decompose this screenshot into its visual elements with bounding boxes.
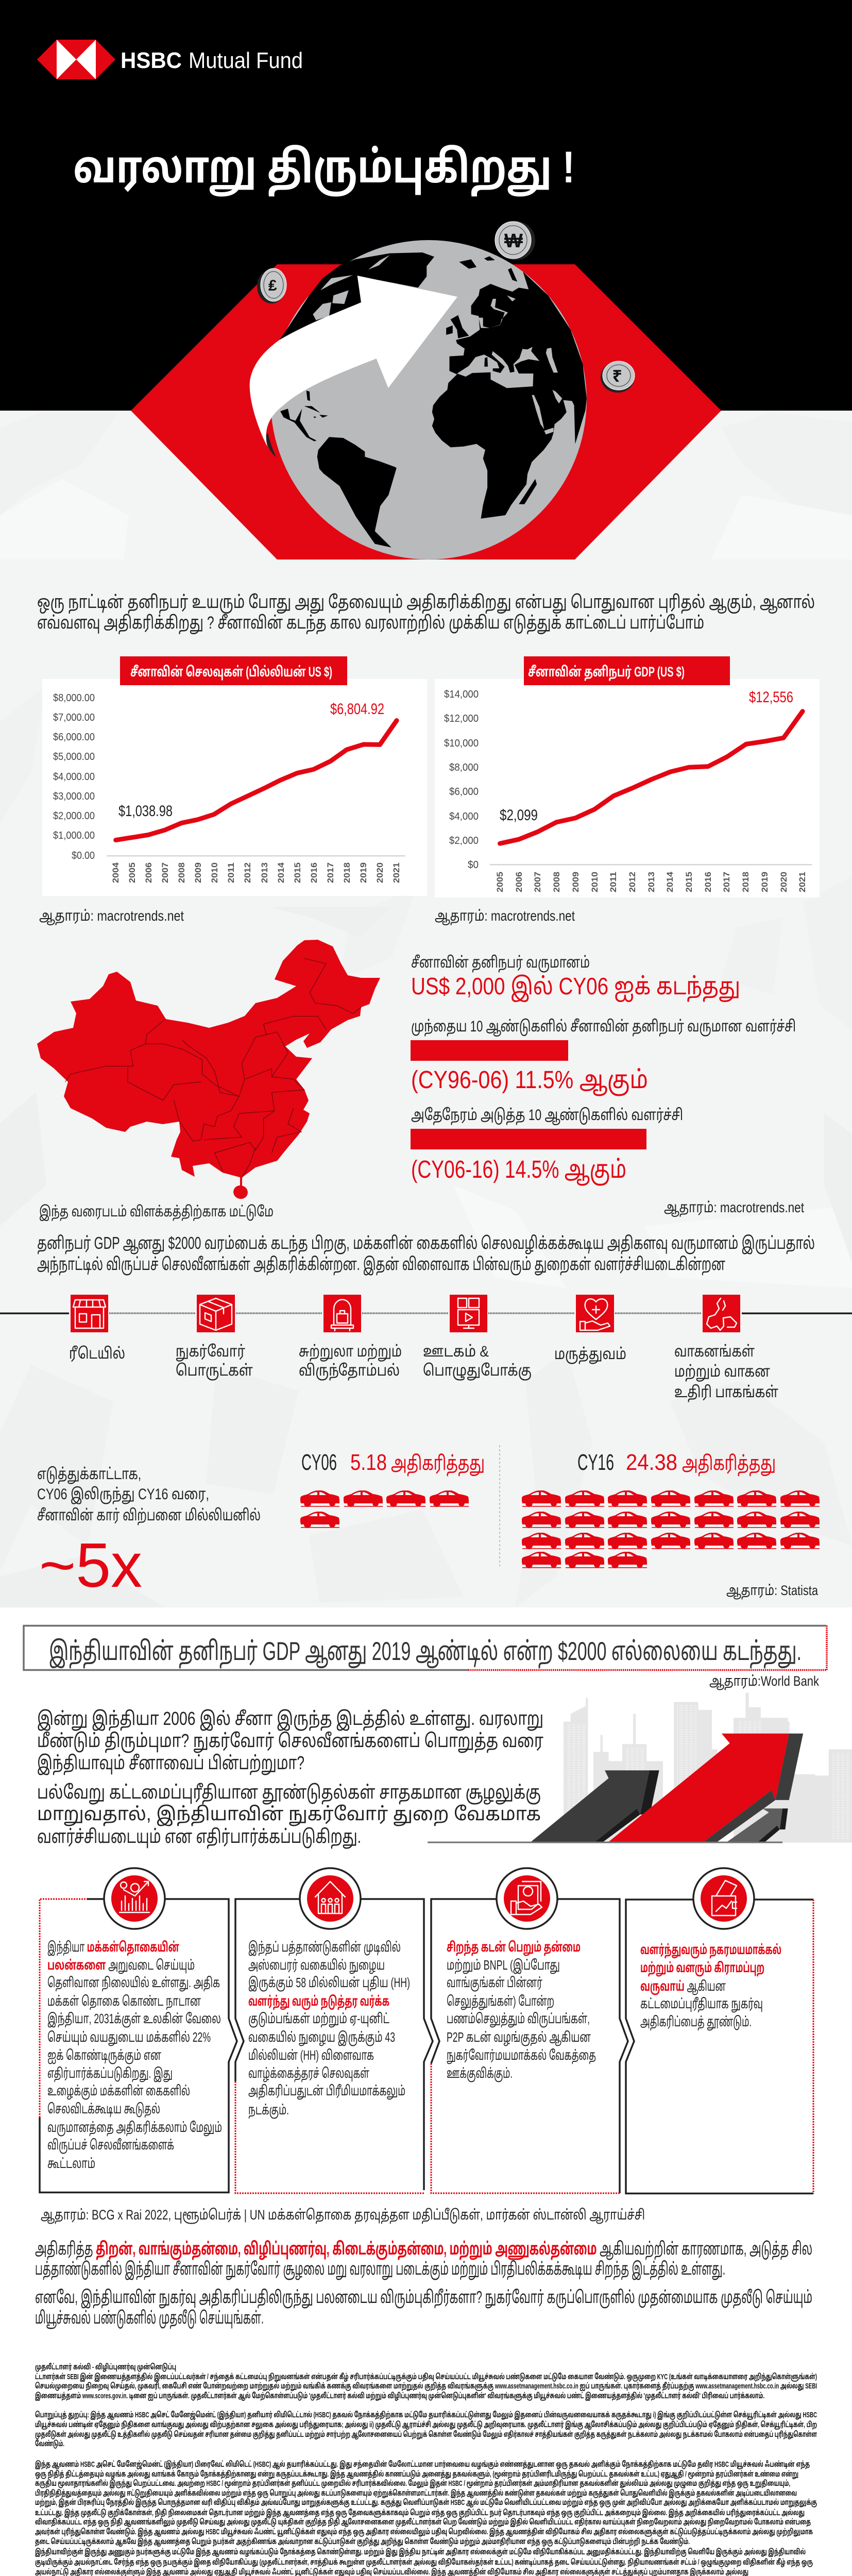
- chart panel: China expenditure: $3,000.00: [53, 791, 95, 802]
- text: credit and payments: செலுத்துங்கள்) போன்ற: [447, 1993, 554, 2010]
- text: credit and payments: வாங்குங்கள் பின்னர்: [447, 1975, 542, 1991]
- sector label: consumer goods: நுகர்வோர்: [176, 1343, 245, 1362]
- hero: globe with arrow: [250, 240, 587, 560]
- sector label: healthcare: மருத்துவம்: [554, 1346, 626, 1364]
- big stat: ~5x: ~5x: [39, 1530, 142, 1600]
- text: aspirers and middle class: இந்தப் பத்தாண்டுகளின் முடிவில்: [248, 1939, 401, 1956]
- chart panel: China GDP per capita: $6,000: [449, 786, 479, 798]
- sector label: tourism: சுற்றுலா மற்றும்: [299, 1343, 402, 1362]
- header black band: [0, 0, 852, 411]
- India paragraph 1: மீண்டும் திரும்புமா? நுகர்வோர் செலவீனங்களைப் பொறுத்த வரை: [37, 1730, 543, 1753]
- sector label: automobiles: உதிரி பாகங்கள்: [674, 1384, 778, 1402]
- logo: HSBC Mutual Fund: [37, 40, 303, 79]
- text: urbanisation and rural income: மற்றும் வளரும் கிராமப்புற: [640, 1960, 764, 1977]
- chart panel: China GDP per capita: $4,000: [449, 811, 479, 822]
- chart panel: China expenditure: 2019: [359, 862, 368, 883]
- text: aspirers and middle class: [248, 1939, 410, 2119]
- panel: urbanisation and rural income: [626, 1868, 813, 2194]
- sector timeline: [0, 1295, 852, 1402]
- chart panel: China GDP per capita: $0: [468, 859, 479, 871]
- CY16 cars: [522, 1490, 820, 1568]
- chart panel: China GDP per capita: $8,000: [449, 762, 479, 773]
- text: credit and payments: மற்றும் BNPL (இப்போது: [447, 1957, 560, 1974]
- chart panel: China expenditure: $5,000.00: [53, 751, 95, 762]
- icon: coin rupee: [601, 361, 635, 393]
- chart panel: China GDP per capita: 2015: [684, 872, 694, 892]
- sector label: automobiles: வாகனங்கள்: [674, 1343, 755, 1360]
- text: urbanisation and rural income: அதிகரிப்பைத் தூண்டும்.: [640, 2014, 752, 2030]
- source: macrotrends: ஆதாரம்: macrotrends.net: [664, 1199, 804, 1217]
- chart panel: China GDP per capita: சீனாவின் தனிநபர் GDP (US $): [528, 664, 685, 681]
- sector label: media: [423, 1343, 532, 1381]
- panel: aspirers and middle class: [235, 1868, 433, 2193]
- sector label: tourism: விருந்தோம்பல்: [299, 1362, 400, 1381]
- stats: China per capita income: சீனாவின் தனிநபர் வருமானம்: [411, 954, 590, 973]
- chart panel: China expenditure: $6,000.00: [53, 732, 95, 743]
- source: World Bank: ஆதாரம்:World Bank: [709, 1673, 819, 1690]
- disclaimer fine print: முதலீட்டாளர் கல்வி - விழிப்புணர்வு முன்னெடுப்பு: [35, 2362, 176, 2372]
- chart panel: China expenditure: $4,000.00: [53, 771, 95, 783]
- chart panel: China expenditure: $1,000.00: [53, 830, 95, 841]
- text: demographic dividend: விருப்பச் செலவீனங்களைக்: [47, 2137, 174, 2154]
- chart panel: China expenditure: 2016: [309, 862, 319, 883]
- icon: finance hand: [497, 1868, 557, 1929]
- chart panel: China GDP per capita: 2010: [590, 872, 600, 892]
- text: aspirers and middle class: நடக்கும்.: [248, 2102, 289, 2119]
- eurasia and africa: [432, 272, 587, 519]
- text: credit and payments: நுகர்வோர்மயமாக்கல் வேகத்தை: [447, 2047, 596, 2064]
- chart panel: China expenditure: 2014: [276, 862, 286, 883]
- icon: coin pound: ₤: [268, 277, 277, 294]
- icon: healthcare: [576, 1295, 614, 1332]
- chart panel: China expenditure: $2,000.00: [53, 810, 95, 822]
- CY06 heading: CY06: [301, 1450, 337, 1475]
- icon: coin won: ₩: [504, 230, 523, 252]
- text: credit and payments: ஊக்குவிக்கும்.: [447, 2065, 513, 2082]
- example text: car sales: எடுத்துக்காட்டாக,: [37, 1466, 141, 1484]
- chart panel: China GDP per capita: 2008: [552, 872, 561, 892]
- text: aspirers and middle class: அஸ்பைரர் வகையில் நுழைய: [248, 1957, 385, 1974]
- logo: HSBC Mutual Fund: Mutual Fund: [189, 48, 303, 73]
- India paragraph 2: பல்வேறு கட்டமைப்புரீதியான தூண்டுதல்கள் சாதகமான சூழலுக்கு: [37, 1782, 541, 1805]
- camouflage background: [0, 411, 852, 1607]
- icon: coin pound: [257, 268, 286, 303]
- callout: India crossed $2000: [24, 1625, 827, 1670]
- chart panel: China GDP per capita: $12,556: [749, 689, 793, 706]
- chart panel: China expenditure: 2018: [342, 862, 352, 883]
- icon: tourism: [323, 1295, 361, 1332]
- chart panel: China expenditure: 2006: [144, 862, 154, 883]
- icon: retail: [71, 1295, 108, 1332]
- text: urbanisation and rural income: [640, 1942, 781, 2030]
- chart panel: China GDP per capita: 2017: [722, 872, 731, 892]
- disclaimer fine print: வேண்டும்.: [35, 2439, 64, 2449]
- stats: China per capita income: US$ 2,000 இல் CY06 ஐக் கடந்தது: [411, 973, 740, 1003]
- map of China: [37, 940, 380, 1200]
- hero: red hexagon: [131, 264, 721, 560]
- panel: credit and payments: [431, 1868, 628, 2193]
- source: chart 2: ஆதாரம்: macrotrends.net: [435, 908, 575, 925]
- chart panel: China expenditure: $8,000.00: [53, 692, 95, 704]
- seas: [479, 299, 508, 328]
- chart panel: China GDP per capita: 2007: [533, 872, 542, 892]
- greenland and north america: [279, 252, 434, 340]
- arrow: [250, 276, 457, 447]
- sector label: retail: ரீடெயில்: [69, 1345, 125, 1362]
- text: credit and payments: பணம்செலுத்தும் விருப்பங்கள்,: [447, 2011, 590, 2027]
- chart panel: China GDP per capita: $12,000: [444, 713, 479, 724]
- text: demographic dividend: இந்தியா, 2031க்குள் உலகின் வேலை: [47, 2011, 221, 2028]
- uk and ireland: [446, 315, 469, 338]
- conclusion paragraph: மியூச்சுவல் பண்டுகளில் முதலீடு செய்யுங்கள்.: [35, 2308, 264, 2329]
- text: aspirers and middle class: வகையில் நுழைய இருக்கும் 43: [248, 2029, 395, 2046]
- chart panel: China GDP per capita: 2013: [646, 872, 656, 892]
- icon: coin won: [495, 221, 535, 260]
- source: BCG: ஆதாரம்: BCG x Rai 2022, புளூம்பெர்க் | UN மக்கள்தொகை தரவுத்தள மதிப்பீடுகள், மார்கன் ஸ்டான்லி ஆராய்ச்சி: [41, 2207, 645, 2224]
- icon: wallet: [693, 1868, 754, 1929]
- text: aspirers and middle class: வளர்ந்து வரும் நடுத்தர வர்க்க: [248, 1993, 389, 2010]
- sector label: media: ஊடகம் &: [423, 1343, 489, 1360]
- CY16 heading: அதிகரித்தது: [682, 1453, 776, 1476]
- chart panel: China GDP per capita: $2,099: [500, 807, 538, 824]
- sector label: consumer goods: பொருட்கள்: [176, 1362, 253, 1381]
- India paragraph 1: இந்தியாவும் சீனாவைப் பின்பற்றுமா?: [37, 1752, 304, 1775]
- stats: China per capita income: (CY96-06) 11.5% ஆகும்: [411, 1066, 648, 1096]
- intro text: [37, 592, 815, 634]
- sector label: media: பொழுதுபோக்கு: [423, 1362, 532, 1381]
- growth arrows: [428, 1734, 803, 1843]
- India paragraph 1: இன்று இந்தியா 2006 இல் சீனா இருந்த இடத்தில் உள்ளது. வரலாறு: [37, 1708, 543, 1731]
- chart panel: China GDP per capita: 2005: [495, 872, 505, 892]
- chart panel: China GDP per capita: 2018: [741, 872, 751, 892]
- stats: China per capita income: அதேநேரம் அடுத்த 10 ஆண்டுகளில் வளர்ச்சி: [411, 1107, 683, 1125]
- chart panel: China GDP per capita: [435, 656, 820, 897]
- chart panel: China expenditure: 2010: [210, 862, 219, 883]
- chart panel: China expenditure: 2015: [293, 862, 302, 883]
- text: aspirers and middle class: இருக்கும் 58 மில்லியன் புதிய (HH): [248, 1975, 410, 1991]
- chart panel: China expenditure: 2009: [193, 862, 203, 883]
- map note: இந்த வரைபடம் விளக்கத்திற்காக மட்டுமே: [39, 1204, 274, 1221]
- CY16 heading: CY16: [577, 1450, 614, 1475]
- chart panel: China expenditure: 2012: [243, 862, 252, 883]
- India paragraph 2: [37, 1782, 541, 1849]
- chart panel: China GDP per capita: $14,000: [444, 689, 479, 700]
- logo: HSBC Mutual Fund: HSBC: [121, 48, 182, 73]
- chart panel: China expenditure: 2007: [160, 862, 170, 883]
- text: demographic dividend: வருமானத்தை அதிகரிக்கலாம் மேலும்: [47, 2120, 222, 2136]
- south and central america: [317, 437, 397, 548]
- chart panel: China GDP per capita: 2012: [627, 872, 637, 892]
- icon: consumer goods: [197, 1295, 235, 1332]
- text: aspirers and middle class: அதிகரிப்பதுடன் பிரீமியமாக்கலும்: [248, 2083, 405, 2099]
- text: demographic dividend: [47, 1939, 222, 2171]
- panel: demographic dividend: [40, 1868, 237, 2193]
- chart panel: China GDP per capita: 2019: [760, 872, 770, 892]
- chart panel: China expenditure: $6,804.92: [330, 701, 384, 718]
- chart panel: China expenditure: 2011: [226, 862, 236, 883]
- text: aspirers and middle class: மில்லியன் (HH) விளைவாக: [248, 2047, 374, 2063]
- sector label: consumer goods: [176, 1343, 253, 1381]
- chart panel: China expenditure: 2017: [326, 862, 335, 883]
- chart panel: China expenditure: $1,038.98: [118, 803, 173, 820]
- CY06 heading: 5.18: [350, 1450, 387, 1475]
- CY06 heading: அதிகரித்தது: [391, 1453, 485, 1476]
- icon: media: [450, 1295, 487, 1332]
- text: demographic dividend: கூட்டலாம்: [47, 2156, 95, 2171]
- example text: car sales: [37, 1466, 261, 1526]
- icon: automobiles: [703, 1295, 740, 1332]
- chart panel: China GDP per capita: 2011: [608, 872, 618, 892]
- chart panel: China expenditure: 2021: [391, 862, 401, 883]
- chart panel: China expenditure: 2005: [127, 862, 137, 883]
- chart panel: China GDP per capita: 2014: [665, 871, 675, 892]
- chart panel: China expenditure: 2008: [177, 862, 186, 883]
- chart panel: China GDP per capita: $2,000: [449, 835, 479, 846]
- title: வரலாறு திரும்புகிறது !: [73, 143, 575, 197]
- icon: demographics: [104, 1868, 165, 1929]
- CY06 cars: [300, 1490, 469, 1528]
- sector label: automobiles: மற்றும் வாகன: [674, 1363, 770, 1382]
- text: aspirers and middle class: வாழ்க்கைத்தரச் செலவுகள்: [248, 2065, 369, 2082]
- chart panel: China expenditure: சீனாவின் செலவுகள் (பில்லியன் US $): [130, 664, 332, 681]
- chart panel: China GDP per capita: 2021: [797, 872, 807, 892]
- example text: car sales: சீனாவின் கார் விற்பனை மில்லியனில்: [37, 1507, 261, 1526]
- conclusion paragraph: [35, 2239, 812, 2329]
- chart panel: China GDP per capita: 2020: [779, 872, 789, 892]
- CY16 heading: 24.38: [626, 1450, 677, 1475]
- chart panel: China GDP per capita: 2016: [703, 872, 713, 892]
- text: credit and payments: P2P கடன் வழங்குதல் ஆகியன: [447, 2029, 591, 2046]
- discretionary spending paragraph: [37, 1233, 815, 1276]
- chart panel: China expenditure: $7,000.00: [53, 712, 95, 723]
- India paragraph 1: [37, 1708, 543, 1775]
- chart panel: China expenditure: 2020: [375, 862, 385, 883]
- text: demographic dividend: பலன்களை அறுவடை செய்யும்: [47, 1957, 195, 1974]
- example text: car sales: CY06 இலிருந்து CY16 வரை,: [37, 1486, 209, 1504]
- text: demographic dividend: தெளிவான நிலையில் உள்ளது. அதிக: [47, 1975, 220, 1992]
- chart panel: China expenditure: 2004: [111, 862, 121, 883]
- text: aspirers and middle class: குடும்பங்கள் மற்றும் ஏ-யுனிட்: [248, 2011, 389, 2028]
- stats: China per capita income: (CY06-16) 14.5% ஆகும்: [411, 1156, 626, 1185]
- icon: household: [300, 1868, 361, 1929]
- text: credit and payments: [447, 1939, 596, 2082]
- text: demographic dividend: இந்தியா மக்கள்தொகையின்: [47, 1939, 179, 1956]
- disclaimer fine print: [35, 2362, 817, 2576]
- text: credit and payments: சிறந்த கடன் பெறும் தன்மை: [447, 1939, 581, 1956]
- chart panel: China expenditure: [42, 656, 427, 896]
- India paragraph 2: வளர்ச்சியடையும் என எதிர்பார்க்கப்படுகிறது.: [37, 1826, 361, 1849]
- chart panel: China GDP per capita: $10,000: [444, 738, 479, 749]
- sector label: automobiles: [674, 1343, 778, 1402]
- chart panel: China expenditure: 2013: [260, 862, 269, 883]
- text: demographic dividend: ஐக் கொண்டிருக்கும் என: [47, 2047, 161, 2064]
- source: Statista: ஆதாரம்: Statista: [726, 1583, 819, 1600]
- text: demographic dividend: எதிர்பார்க்கப்படுகிறது. இது: [47, 2065, 173, 2082]
- text: demographic dividend: மக்கள் தொகை கொண்ட நாடான: [47, 1993, 201, 2010]
- illustration: city skyline: [564, 1693, 852, 1843]
- text: urbanisation and rural income: கட்டமைப்புரீதியாக நுகர்வு: [640, 1996, 763, 2012]
- illustration: skyline windows: [566, 1705, 849, 1840]
- CY16 heading: [577, 1450, 776, 1476]
- chart panel: China GDP per capita: 2006: [514, 872, 524, 892]
- chart panel: China expenditure: $0.00: [72, 850, 95, 861]
- stats: China per capita income: [411, 954, 796, 1185]
- icon: coin rupee: ₹: [612, 367, 622, 385]
- sector label: tourism: [299, 1343, 402, 1381]
- text: demographic dividend: உழைக்கும் மக்களின் கைகளில்: [47, 2083, 190, 2099]
- chart panel: China GDP per capita: 2009: [571, 872, 581, 892]
- text: demographic dividend: செய்யும் வயதுடைய மக்களில் 22%: [47, 2029, 211, 2046]
- text: demographic dividend: செலவிடக்கூடிய கூடுதல்: [47, 2101, 160, 2117]
- source: chart 1: ஆதாரம்: macrotrends.net: [39, 908, 184, 925]
- CY06 heading: [301, 1450, 485, 1476]
- text: urbanisation and rural income: வருவாய் ஆகியன: [640, 1978, 726, 1995]
- India paragraph 2: மாறுவதால், இந்தியாவின் நுகர்வோர் துறை வேகமாக: [37, 1803, 541, 1826]
- madagascar: [519, 479, 537, 504]
